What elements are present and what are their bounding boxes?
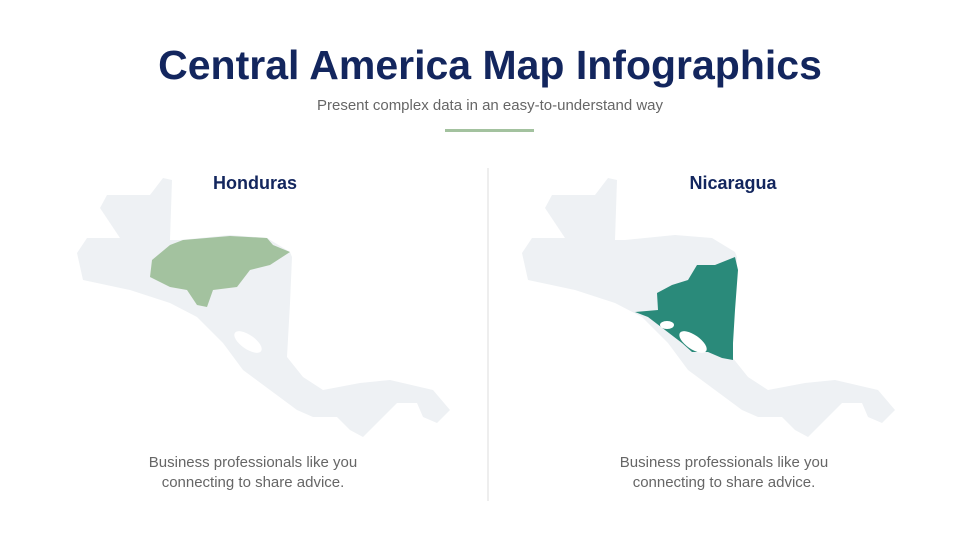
- title: Central America Map Infographics: [158, 42, 822, 88]
- text: Nicaragua description: connecting to share advice.: [633, 474, 815, 491]
- heading: Nicaragua: Nicaragua: [689, 173, 777, 193]
- text: Honduras description: Business professionals like you: [149, 454, 357, 471]
- subtitle: Present complex data in an easy-to-understand way: [317, 97, 663, 114]
- text: Nicaragua description: [620, 454, 828, 491]
- text: Honduras description: [149, 454, 357, 491]
- accent line: [445, 129, 534, 132]
- heading: Honduras: Honduras: [213, 173, 297, 193]
- text: Honduras description: connecting to share advice.: [162, 474, 344, 491]
- map: Honduras highlighted: [77, 178, 450, 437]
- text: Nicaragua description: Business professionals like you: [620, 454, 828, 471]
- center divider: [487, 168, 489, 501]
- map: Nicaragua highlighted: [522, 178, 895, 437]
